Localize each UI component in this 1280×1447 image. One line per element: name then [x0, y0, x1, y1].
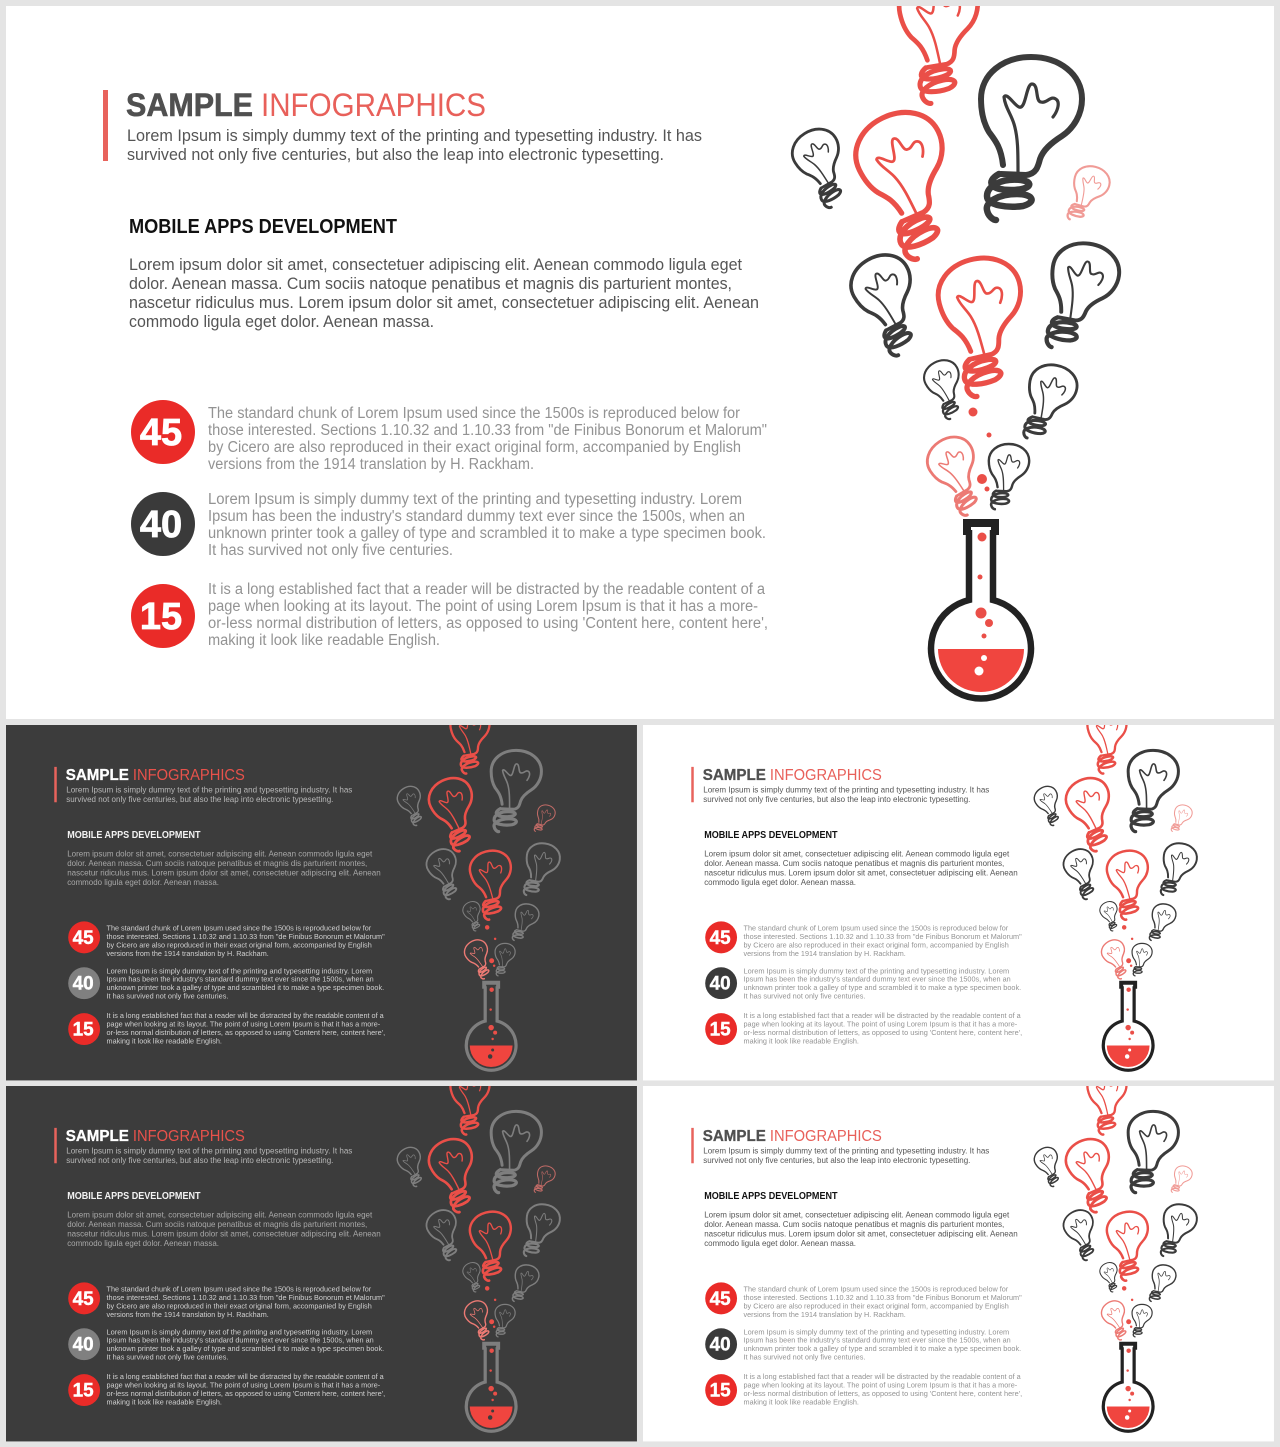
title block: SAMPLE	[703, 767, 766, 784]
title block: INFOGRAPHICS	[133, 767, 245, 784]
item 40	[68, 1327, 384, 1362]
item 45: The standard chunk of Lorem Ipsum used since the 1500s is reproduced below for	[208, 405, 740, 422]
item 15: page when looking at its layout. The point of using Lorem Ipsum is that it has a more-	[744, 1381, 1018, 1390]
item 15: 15	[710, 1020, 731, 1041]
item 40: 40	[710, 1335, 731, 1356]
item 45: by Cicero are also reproduced in their exact original form, accompanied by English	[744, 940, 1009, 949]
item 15: It is a long established fact that a reader will be distracted by the readable content of a	[107, 1011, 384, 1020]
body paragraph	[67, 1211, 381, 1248]
item 15: 15	[710, 1381, 731, 1402]
item 45	[131, 400, 767, 473]
item 40: 40	[710, 974, 731, 995]
title block: survived not only five centuries, but also the leap into electronic typesetting.	[66, 1156, 333, 1165]
item 40: It has survived not only five centuries.	[744, 1353, 865, 1362]
item 15: making it look like readable English.	[107, 1398, 222, 1407]
body paragraph: commodo ligula eget dolor. Aenean massa.	[129, 313, 434, 331]
body paragraph: commodo ligula eget dolor. Aenean massa.	[67, 878, 219, 887]
item 45: those interested. Sections 1.10.32 and 1.10.33 from "de Finibus Bonorum et Malorum"	[744, 1293, 1022, 1302]
item 40: unknown printer took a galley of type and scrambled it to make a type specimen book.	[744, 1344, 1021, 1353]
item 15: making it look like readable English.	[744, 1037, 859, 1046]
item 40: It has survived not only five centuries.	[107, 992, 228, 1001]
body paragraph: nascetur ridiculus mus. Lorem ipsum dolor sit amet, consectetuer adipiscing elit. Aenean	[67, 869, 381, 878]
item 45: those interested. Sections 1.10.32 and 1.10.33 from "de Finibus Bonorum et Malorum"	[744, 932, 1022, 941]
item 45: The standard chunk of Lorem Ipsum used since the 1500s is reproduced below for	[107, 923, 372, 932]
title block	[691, 767, 989, 804]
body paragraph: dolor. Aenean massa. Cum sociis natoque penatibus et magnis dis parturient montes,	[704, 859, 1004, 868]
body paragraph: commodo ligula eget dolor. Aenean massa.	[67, 1239, 219, 1248]
item 40	[705, 966, 1021, 1001]
title block	[103, 87, 702, 164]
illustration: bulbs rising from flask	[785, 0, 1123, 699]
title block: SAMPLE	[66, 1128, 129, 1145]
item 40: Lorem Ipsum is simply dummy text of the printing and typesetting industry. Lorem	[107, 966, 372, 975]
item 45: versions from the 1914 translation by H. Rackham.	[107, 1310, 269, 1319]
body paragraph: nascetur ridiculus mus. Lorem ipsum dolor sit amet, consectetuer adipiscing elit. Aenean	[704, 1230, 1018, 1239]
item 40	[68, 966, 384, 1001]
body paragraph: dolor. Aenean massa. Cum sociis natoque penatibus et magnis dis parturient montes,	[67, 859, 367, 868]
item 15: making it look like readable English.	[208, 632, 440, 649]
item 45: those interested. Sections 1.10.32 and 1.10.33 from "de Finibus Bonorum et Malorum"	[107, 932, 385, 941]
body paragraph: dolor. Aenean massa. Cum sociis natoque penatibus et magnis dis parturient montes,	[704, 1220, 1004, 1229]
item 45: 45	[710, 1289, 731, 1310]
title block: survived not only five centuries, but also the leap into electronic typesetting.	[703, 795, 970, 804]
title block: SAMPLE	[66, 767, 129, 784]
item 45: The standard chunk of Lorem Ipsum used since the 1500s is reproduced below for	[744, 923, 1009, 932]
body paragraph	[704, 1211, 1018, 1248]
item 40: Lorem Ipsum is simply dummy text of the printing and typesetting industry. Lorem	[744, 966, 1009, 975]
body paragraph: nascetur ridiculus mus. Lorem ipsum dolor sit amet, consectetuer adipiscing elit. Aenean	[129, 294, 759, 312]
illustration: bulbs rising from flask	[1030, 705, 1199, 1070]
section heading: MOBILE APPS DEVELOPMENT	[129, 216, 397, 238]
body paragraph: commodo ligula eget dolor. Aenean massa.	[704, 878, 856, 887]
item 45: those interested. Sections 1.10.32 and 1.10.33 from "de Finibus Bonorum et Malorum"	[208, 422, 767, 439]
title block: INFOGRAPHICS	[261, 87, 486, 123]
item 15: 15	[73, 1020, 94, 1041]
item 45: versions from the 1914 translation by H. Rackham.	[744, 949, 906, 958]
item 40: It has survived not only five centuries.	[744, 992, 865, 1001]
item 15: or-less normal distribution of letters, as opposed to using 'Content here, content here',	[107, 1389, 385, 1398]
item 45: versions from the 1914 translation by H. Rackham.	[744, 1310, 906, 1319]
item 40: Lorem Ipsum is simply dummy text of the printing and typesetting industry. Lorem	[208, 491, 742, 508]
item 40: It has survived not only five centuries.	[107, 1353, 228, 1362]
body paragraph: dolor. Aenean massa. Cum sociis natoque penatibus et magnis dis parturient montes,	[129, 275, 732, 293]
item 40: Ipsum has been the industry's standard dummy text ever since the 1500s, when an	[208, 508, 745, 525]
item 15: or-less normal distribution of letters, as opposed to using 'Content here, content here',	[744, 1389, 1022, 1398]
item 45: versions from the 1914 translation by H. Rackham.	[107, 949, 269, 958]
item 40	[705, 1327, 1021, 1362]
title block: SAMPLE	[703, 1128, 766, 1145]
body paragraph: nascetur ridiculus mus. Lorem ipsum dolor sit amet, consectetuer adipiscing elit. Aenean	[704, 869, 1018, 878]
item 15: page when looking at its layout. The point of using Lorem Ipsum is that it has a more-	[208, 598, 758, 615]
item 45: 45	[710, 928, 731, 949]
title block: Lorem Ipsum is simply dummy text of the printing and typesetting industry. It has	[66, 1146, 352, 1155]
item 40	[131, 491, 766, 559]
title block: Lorem Ipsum is simply dummy text of the printing and typesetting industry. It has	[703, 1146, 989, 1155]
body paragraph: Lorem ipsum dolor sit amet, consectetuer adipiscing elit. Aenean commodo ligula eget	[67, 850, 373, 859]
item 45	[68, 1282, 385, 1319]
section heading: MOBILE APPS DEVELOPMENT	[67, 830, 201, 841]
title block	[54, 1128, 352, 1165]
item 45: The standard chunk of Lorem Ipsum used since the 1500s is reproduced below for	[744, 1284, 1009, 1293]
item 15: 15	[140, 596, 182, 638]
item 15: page when looking at its layout. The point of using Lorem Ipsum is that it has a more-	[744, 1020, 1018, 1029]
item 15	[68, 1372, 385, 1407]
item 40: Lorem Ipsum is simply dummy text of the printing and typesetting industry. Lorem	[744, 1327, 1009, 1336]
item 15: making it look like readable English.	[107, 1037, 222, 1046]
item 45: 45	[73, 1289, 94, 1310]
item 40: 40	[140, 504, 182, 546]
item 40: 40	[73, 1335, 94, 1356]
title block: INFOGRAPHICS	[770, 1128, 882, 1145]
item 15: or-less normal distribution of letters, as opposed to using 'Content here, content here',	[208, 615, 768, 632]
item 15	[68, 1011, 385, 1046]
item 15: It is a long established fact that a reader will be distracted by the readable content of a	[208, 581, 765, 598]
body paragraph	[704, 850, 1018, 887]
item 15: page when looking at its layout. The point of using Lorem Ipsum is that it has a more-	[107, 1020, 381, 1029]
item 45: by Cicero are also reproduced in their exact original form, accompanied by English	[107, 1301, 372, 1310]
body paragraph	[129, 256, 759, 331]
item 15: 15	[73, 1381, 94, 1402]
item 45: those interested. Sections 1.10.32 and 1.10.33 from "de Finibus Bonorum et Malorum"	[107, 1293, 385, 1302]
illustration: bulbs rising from flask	[1030, 1066, 1199, 1431]
item 15: page when looking at its layout. The point of using Lorem Ipsum is that it has a more-	[107, 1381, 381, 1390]
body paragraph: Lorem ipsum dolor sit amet, consectetuer adipiscing elit. Aenean commodo ligula eget	[129, 256, 742, 274]
item 40: 40	[73, 974, 94, 995]
title block: survived not only five centuries, but also the leap into electronic typesetting.	[127, 146, 664, 164]
body paragraph	[67, 850, 381, 887]
item 40: unknown printer took a galley of type and scrambled it to make a type specimen book.	[107, 983, 384, 992]
title block	[691, 1128, 989, 1165]
illustration: bulbs rising from flask	[393, 1066, 562, 1431]
item 45: versions from the 1914 translation by H. Rackham.	[208, 456, 534, 473]
title block: INFOGRAPHICS	[133, 1128, 245, 1145]
item 45: 45	[140, 412, 182, 454]
panel: dark slide 1	[6, 705, 637, 1080]
item 45	[68, 921, 385, 958]
panel: main light slide	[6, 0, 1274, 719]
item 15: It is a long established fact that a reader will be distracted by the readable content of a	[744, 1011, 1021, 1020]
title block: survived not only five centuries, but also the leap into electronic typesetting.	[703, 1156, 970, 1165]
item 15: making it look like readable English.	[744, 1398, 859, 1407]
item 40: Ipsum has been the industry's standard dummy text ever since the 1500s, when an	[744, 975, 1011, 984]
item 15: It is a long established fact that a reader will be distracted by the readable content of a	[744, 1372, 1021, 1381]
body paragraph: Lorem ipsum dolor sit amet, consectetuer adipiscing elit. Aenean commodo ligula eget	[67, 1211, 373, 1220]
item 40: Ipsum has been the industry's standard dummy text ever since the 1500s, when an	[107, 1336, 374, 1345]
item 45: by Cicero are also reproduced in their exact original form, accompanied by English	[208, 439, 741, 456]
title block: Lorem Ipsum is simply dummy text of the printing and typesetting industry. It has	[66, 785, 352, 794]
item 15	[705, 1011, 1022, 1046]
section heading: MOBILE APPS DEVELOPMENT	[704, 830, 838, 841]
item 15: or-less normal distribution of letters, as opposed to using 'Content here, content here',	[744, 1028, 1022, 1037]
section heading: MOBILE APPS DEVELOPMENT	[67, 1191, 201, 1202]
title block: SAMPLE	[126, 87, 253, 123]
body paragraph: nascetur ridiculus mus. Lorem ipsum dolor sit amet, consectetuer adipiscing elit. Aenean	[67, 1230, 381, 1239]
title block	[54, 767, 352, 804]
illustration: bulbs rising from flask	[393, 705, 562, 1070]
title block: Lorem Ipsum is simply dummy text of the printing and typesetting industry. It has	[127, 127, 702, 145]
item 45: 45	[73, 928, 94, 949]
panel: dark slide 2	[6, 1066, 637, 1441]
item 40: unknown printer took a galley of type and scrambled it to make a type specimen book.	[744, 983, 1021, 992]
panel: light slide 1	[643, 705, 1274, 1080]
item 40: Ipsum has been the industry's standard dummy text ever since the 1500s, when an	[107, 975, 374, 984]
item 45: by Cicero are also reproduced in their exact original form, accompanied by English	[107, 940, 372, 949]
body paragraph: commodo ligula eget dolor. Aenean massa.	[704, 1239, 856, 1248]
item 40: It has survived not only five centuries.	[208, 542, 453, 559]
item 40: Lorem Ipsum is simply dummy text of the printing and typesetting industry. Lorem	[107, 1327, 372, 1336]
section heading: MOBILE APPS DEVELOPMENT	[704, 1191, 838, 1202]
body paragraph: Lorem ipsum dolor sit amet, consectetuer adipiscing elit. Aenean commodo ligula eget	[704, 850, 1010, 859]
item 45	[705, 921, 1022, 958]
item 40: unknown printer took a galley of type and scrambled it to make a type specimen book.	[208, 525, 766, 542]
body paragraph: dolor. Aenean massa. Cum sociis natoque penatibus et magnis dis parturient montes,	[67, 1220, 367, 1229]
body paragraph: Lorem ipsum dolor sit amet, consectetuer adipiscing elit. Aenean commodo ligula eget	[704, 1211, 1010, 1220]
item 40: Ipsum has been the industry's standard dummy text ever since the 1500s, when an	[744, 1336, 1011, 1345]
item 45: The standard chunk of Lorem Ipsum used since the 1500s is reproduced below for	[107, 1284, 372, 1293]
item 15	[705, 1372, 1022, 1407]
title block: survived not only five centuries, but also the leap into electronic typesetting.	[66, 795, 333, 804]
title block: INFOGRAPHICS	[770, 767, 882, 784]
item 15	[131, 581, 768, 649]
item 45	[705, 1282, 1022, 1319]
item 45: by Cicero are also reproduced in their exact original form, accompanied by English	[744, 1301, 1009, 1310]
item 15: It is a long established fact that a reader will be distracted by the readable content of a	[107, 1372, 384, 1381]
item 40: unknown printer took a galley of type and scrambled it to make a type specimen book.	[107, 1344, 384, 1353]
panel: light slide 2	[643, 1066, 1274, 1441]
item 15: or-less normal distribution of letters, as opposed to using 'Content here, content here',	[107, 1028, 385, 1037]
title block: Lorem Ipsum is simply dummy text of the printing and typesetting industry. It has	[703, 785, 989, 794]
